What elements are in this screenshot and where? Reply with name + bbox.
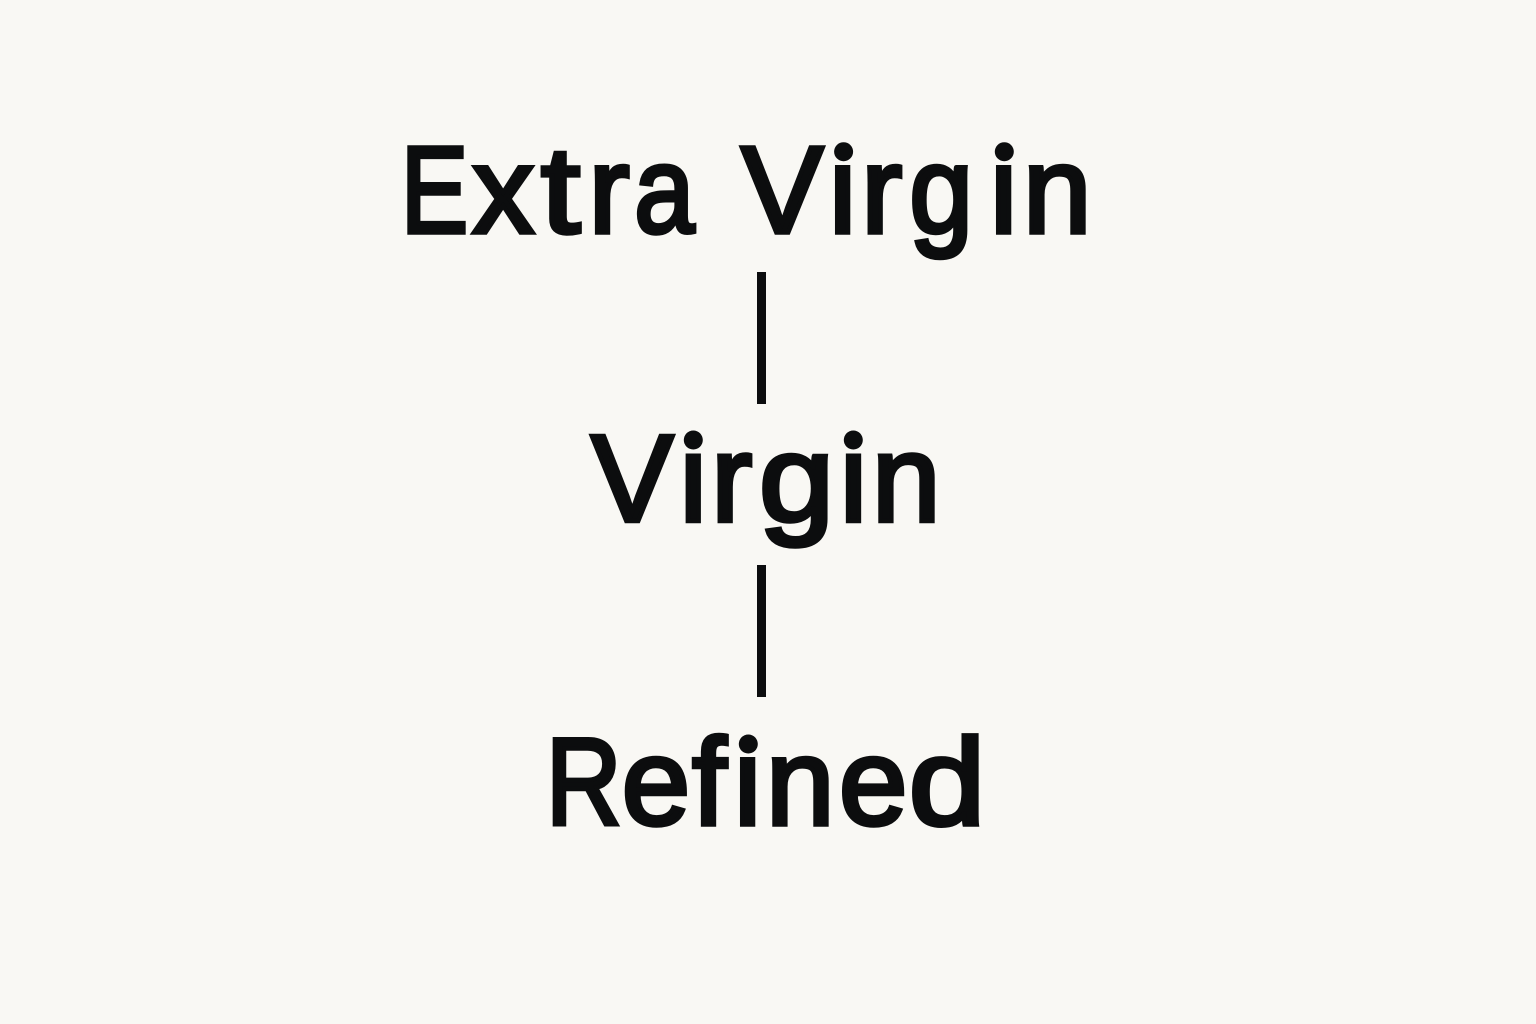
- label: Extra Virgin: V: [741, 122, 823, 260]
- label: Refined: i: [734, 714, 761, 852]
- round dots on the letter i: [682, 136, 1017, 754]
- label: Refined: R: [546, 714, 622, 852]
- label: Extra Virgin: x: [472, 122, 534, 260]
- label: Virgin: n: [872, 411, 940, 548]
- label: Extra Virgin: i: [990, 122, 1017, 260]
- label: Virgin: i: [840, 411, 867, 548]
- label: Extra Virgin: g: [909, 122, 973, 260]
- label: Extra Virgin: E: [401, 122, 468, 260]
- hierarchy diagram: [401, 122, 1091, 852]
- label: Refined: d: [909, 714, 985, 852]
- label: Refined: e: [622, 714, 690, 852]
- label: Extra Virgin: r: [861, 122, 902, 260]
- label: Virgin: g: [759, 411, 834, 548]
- connector: Virgin to Refined: [757, 565, 766, 697]
- label: Extra Virgin: a: [634, 122, 695, 260]
- label: Extra Virgin: r: [589, 122, 630, 260]
- label: Virgin: i: [680, 411, 707, 548]
- label: Extra Virgin: n: [1023, 122, 1091, 260]
- label: Refined: f: [692, 714, 727, 852]
- connector: Extra Virgin to Virgin: [757, 272, 766, 404]
- label: Virgin: r: [711, 411, 752, 548]
- label: Refined: n: [766, 714, 834, 852]
- label: Extra Virgin: i: [829, 122, 856, 260]
- label: Extra Virgin: t: [541, 122, 580, 260]
- label: Virgin: V: [591, 411, 673, 548]
- label: Refined: e: [839, 714, 907, 852]
